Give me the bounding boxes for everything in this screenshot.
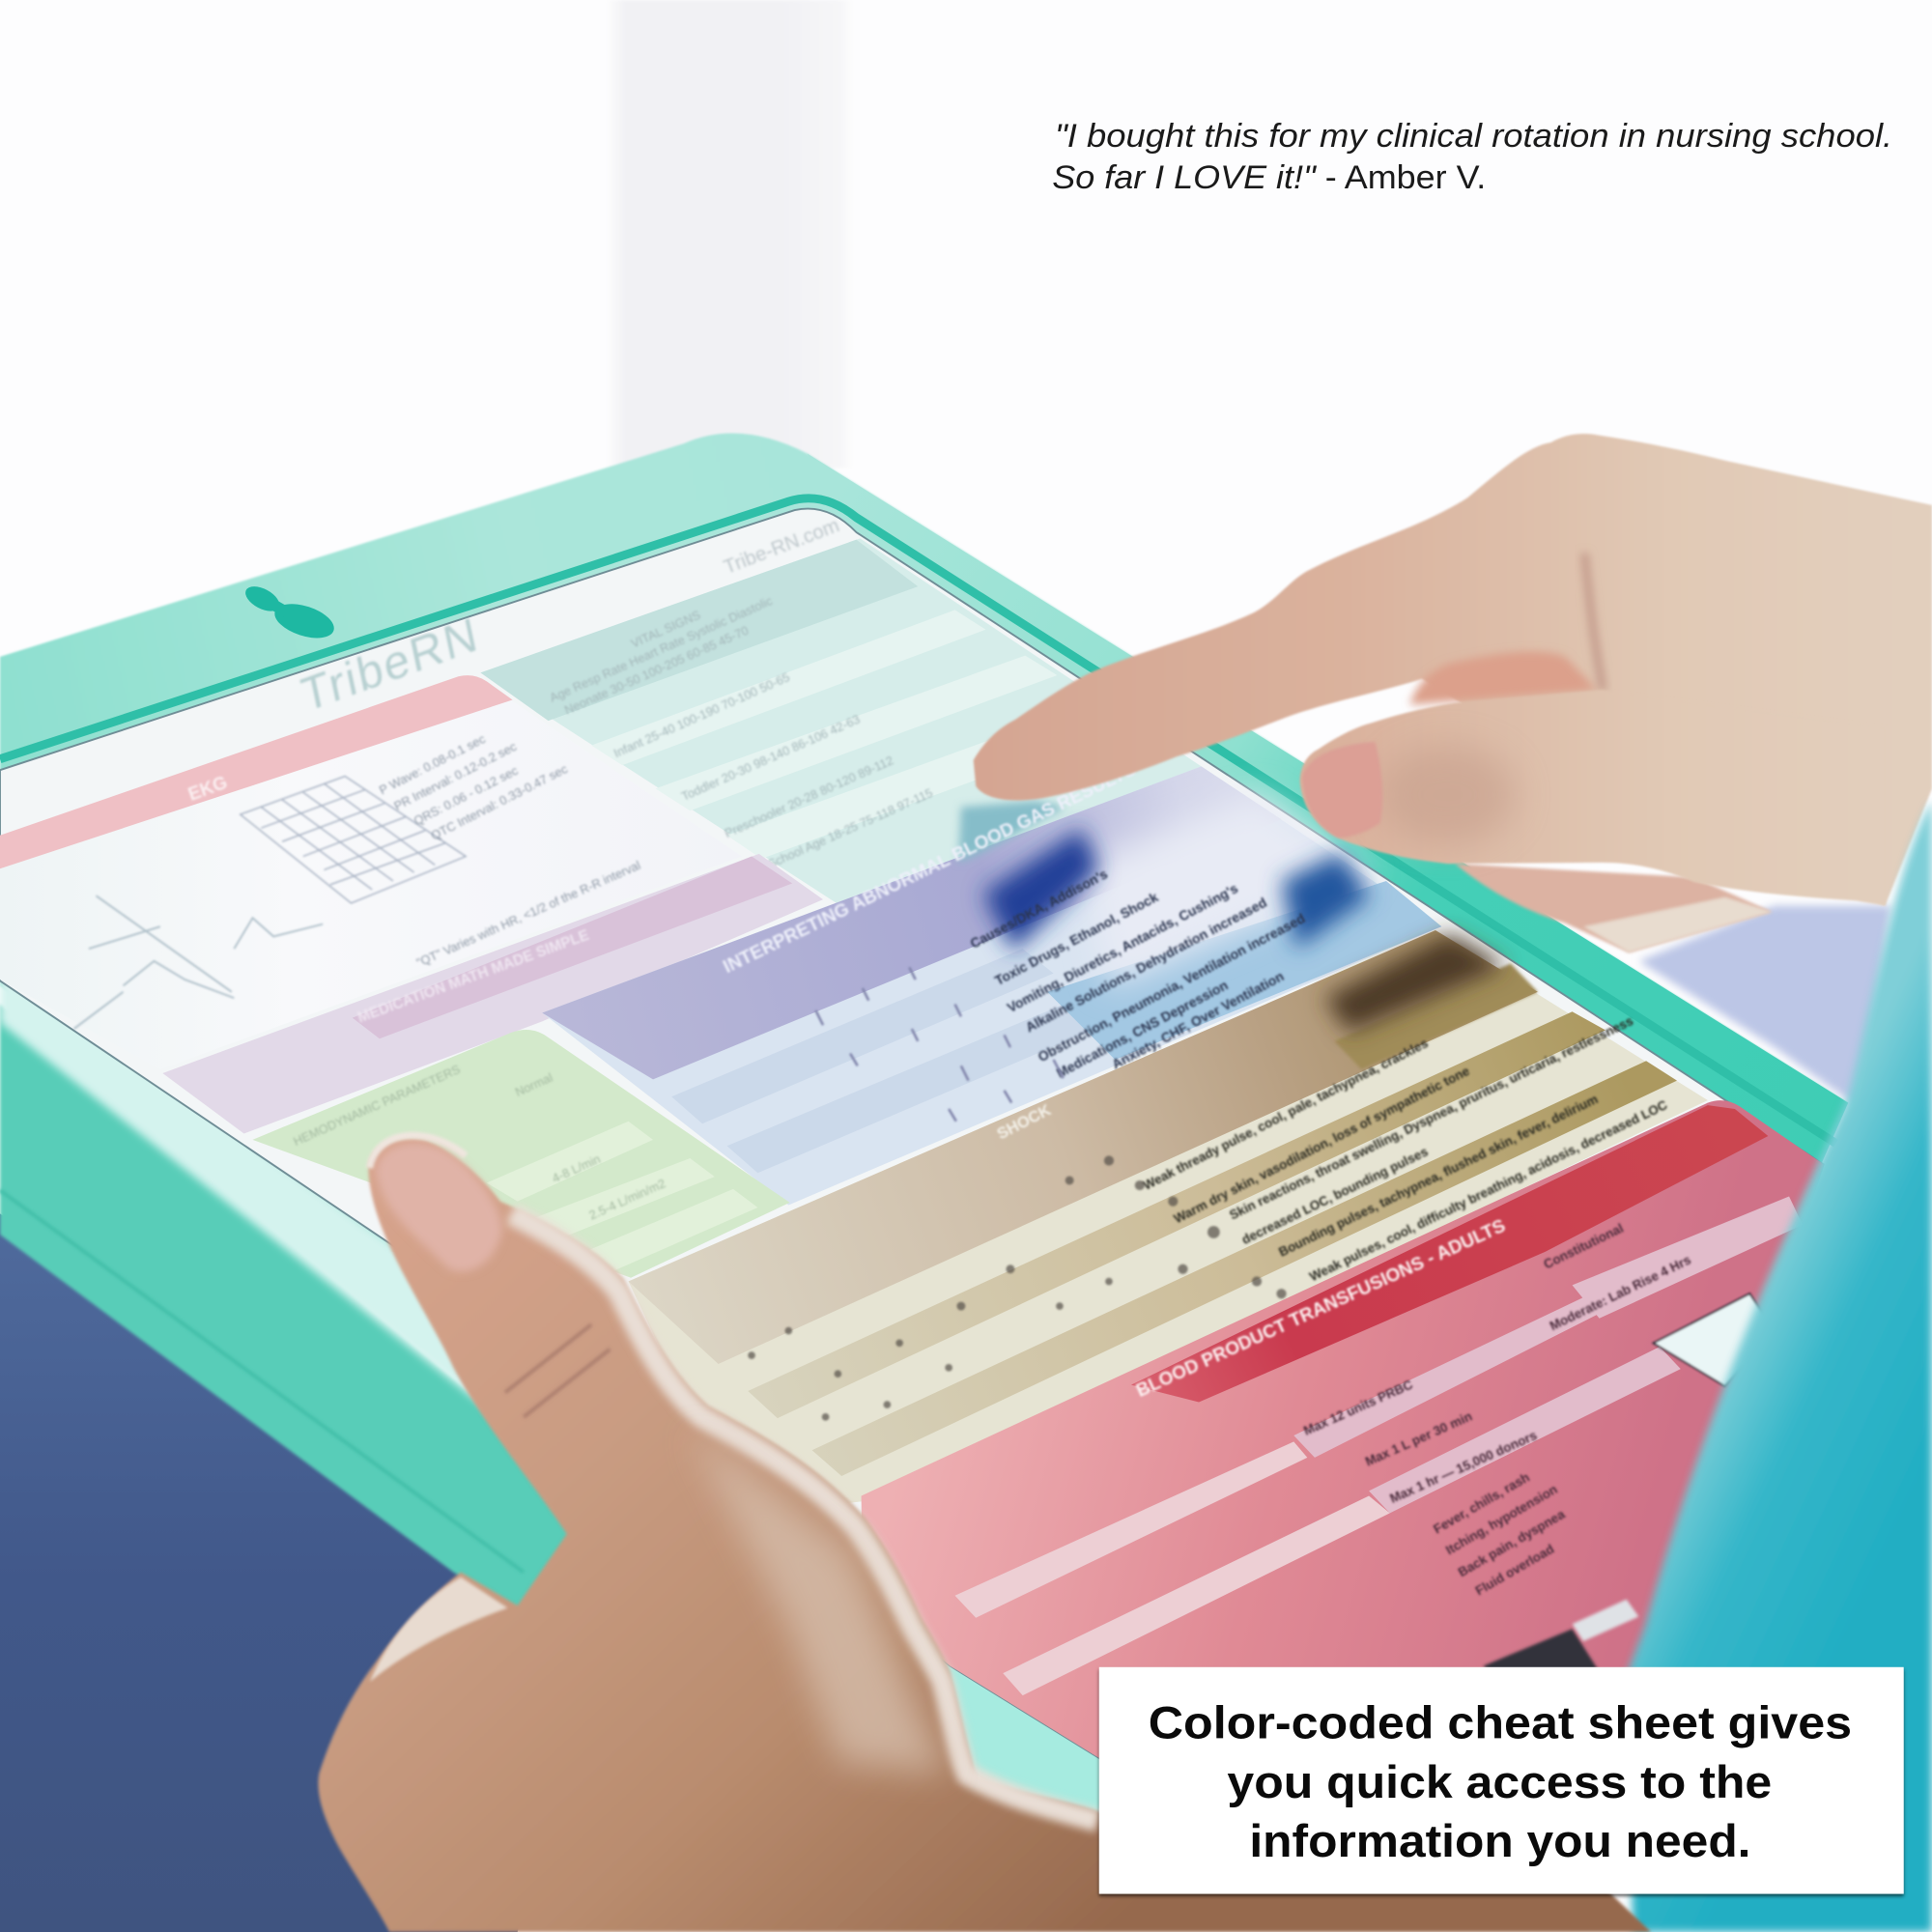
panel: shock <box>629 930 1708 1516</box>
shock assessment lines: Weak pulses, cool, difficulty breathing, acidosis, decreased LOC <box>1307 1097 1670 1284</box>
shock assessment lines: decreased LOC, bounding pulses <box>1239 1144 1431 1247</box>
transfusion lavender rows <box>1293 1197 1803 1513</box>
shock assessment lines <box>1141 1013 1670 1284</box>
shock table marks <box>748 1155 1287 1421</box>
hand: lower left thumb holding <box>318 1135 1651 1932</box>
sheet header logo: TribeRN <box>297 609 481 723</box>
vitals row text: Age Resp Rate Heart Rate Systolic Diastolic <box>548 593 775 705</box>
blood gas cause lines: Toxic Drugs, Ethanol, Shock <box>992 889 1161 988</box>
vitals row text: VITAL SIGNS <box>629 608 702 651</box>
thumb light rim <box>511 1213 1097 1821</box>
EKG interval text: "QT" Varies with HR, <1/2 of the R-R interval <box>414 858 642 970</box>
palm light rim <box>370 1577 508 1682</box>
shock assessment lines: Skin reactions, throat swelling, Dyspnea, pruritus, urticaria, restlessness <box>1227 1013 1635 1222</box>
sleeve: teal scrubs <box>1627 801 1932 1932</box>
sheet corner pale smudge <box>1573 1600 1638 1641</box>
frame: right side <box>807 453 1848 1164</box>
transfusion pale rows <box>955 1441 1390 1695</box>
green background <box>252 1030 790 1278</box>
blood gas background <box>542 766 1441 1205</box>
vitals teal header <box>480 540 918 721</box>
thumb shading <box>1380 746 1516 844</box>
navy trousers background <box>0 1213 591 1932</box>
transfusion text lines: Constitutional <box>1542 1221 1626 1271</box>
hand mottled highlight <box>690 1430 949 1775</box>
green row text: 4-8 L/min <box>550 1151 603 1185</box>
shock header <box>629 930 1538 1364</box>
panel: interpreting blood gas <box>542 759 1441 1205</box>
inner palm pink shade <box>1409 652 1597 705</box>
blood gas cause lines: Medications, CNS Depression <box>1054 977 1231 1081</box>
blood gas header <box>542 766 1282 1079</box>
blood gas cause lines: Causes/DKA, Addison's <box>968 866 1110 952</box>
blood gas heading: INTERPRETING ABNORMAL BLOOD GAS RESULTS <box>721 759 1140 978</box>
transfusion text lines: Itching, hypotension <box>1443 1482 1560 1557</box>
background pillar <box>607 0 853 469</box>
panel: medication math <box>162 854 823 1133</box>
shock heading: SHOCK <box>994 1100 1054 1143</box>
dark blue header spot <box>983 828 1099 952</box>
frame: lower left teal body <box>0 1005 579 1627</box>
EKG grid <box>241 777 466 903</box>
blue shadow spot <box>1282 853 1370 949</box>
vitals row text: Infant 25-40 100-190 70-100 50-65 <box>611 669 792 760</box>
blood gas cause lines: Obstruction, Pneumonia, Ventilation increased <box>1036 910 1308 1065</box>
panel: vital signs <box>480 538 1202 906</box>
index finger and hand back <box>974 434 1932 906</box>
vitals background <box>480 538 1202 906</box>
panel: EKG <box>0 675 742 1069</box>
EKG heading text: EKG <box>185 773 230 806</box>
EKG header <box>0 675 513 868</box>
transfusion text lines: Fever, chills, rash <box>1431 1469 1532 1537</box>
panel: blood product transfusions <box>862 1100 1824 1766</box>
sheet header logo: Tribe-RN.com <box>721 515 842 579</box>
hand: upper right pointing <box>974 434 1932 952</box>
shock dark band <box>1324 934 1506 1033</box>
green row text: HEMODYNAMIC PARAMETERS <box>291 1062 463 1149</box>
green light rows <box>487 1122 757 1275</box>
EKG interval text: PR Interval: 0.12-0.2 sec <box>391 739 520 813</box>
shock olive band <box>1334 963 1538 1069</box>
vitals row text: School Age 18-25 75-118 97-115 <box>765 785 935 871</box>
EKG interval text <box>377 731 642 970</box>
knuckle crease <box>1584 554 1603 690</box>
quote line 2: So far I LOVE it!" - Amber V. <box>1052 159 1486 196</box>
EKG interval text: QTC Interval: 0.33-0.47 sec <box>429 761 570 843</box>
quote <box>1052 118 1892 196</box>
blood gas cause lines: Vomiting, Diuretics, Antacids, Cushing's <box>1005 880 1240 1015</box>
quote line 1: "I bought this for my clinical rotation in nursing school. <box>1055 118 1892 155</box>
thumb nail <box>1302 742 1382 838</box>
blood gas cause lines: Alkaline Solutions, Dehydration increased <box>1023 895 1269 1036</box>
blood gas highlights <box>1084 795 1368 985</box>
blood gas cause lines: Anxiety, CHF, Over Ventilation <box>1109 968 1287 1072</box>
vitals row text: Preschooler 20-28 80-120 89-112 <box>723 753 895 840</box>
transfusion text lines: Moderate: Lab Rise 4 Hrs <box>1548 1252 1693 1333</box>
sheet base <box>0 509 1824 1766</box>
transfusion text lines <box>1301 1221 1693 1598</box>
thumb nail tip rim <box>370 1135 466 1168</box>
sheet corner dark shadow <box>1484 1629 1602 1676</box>
thumb nail <box>376 1143 501 1272</box>
blood gas stripes <box>671 949 1115 1173</box>
shock tan stripes <box>748 1011 1677 1476</box>
EKG interval text: QRS: 0.06 - 0.12 sec <box>412 763 521 828</box>
shock assessment lines: Bounding pulses, tachypnea, flushed skin, fever, delirium <box>1276 1092 1601 1260</box>
EKG waveform <box>74 895 323 1029</box>
frame: keyhole slot <box>242 582 338 644</box>
transfusion text lines: Back pain, dyspnea <box>1456 1507 1568 1579</box>
green row text: Normal <box>513 1070 554 1099</box>
callout: caption box <box>1099 1667 1904 1893</box>
transfusion body <box>862 1100 1824 1766</box>
caption line 2: you quick access to the <box>1227 1757 1772 1808</box>
fingertip pale <box>1583 897 1772 952</box>
transfusion text lines: Max 12 units PRBC <box>1301 1377 1415 1438</box>
medication heading: MEDICATION MATH MADE SIMPLE <box>355 927 591 1026</box>
vitals row text: Toddler 20-30 98-140 86-106 42-63 <box>679 712 862 804</box>
vitals row text: Neonate 30-50 100-205 60-85 45-70 <box>562 623 751 718</box>
caption line 1: Color-coded cheat sheet gives <box>1149 1698 1852 1749</box>
frame: main mint body <box>0 434 1848 1768</box>
sheet header logo <box>297 515 842 723</box>
shock assessment lines: Warm dry skin, vasodilation, loss of sympathetic tone <box>1172 1064 1472 1226</box>
lower fingers under thumb <box>1455 864 1772 952</box>
transfusion white callout <box>1654 1293 1775 1386</box>
thumb <box>1300 690 1886 906</box>
vitals row text <box>548 593 935 871</box>
medication background <box>162 854 823 1133</box>
finger shadow on vitals <box>958 801 1065 863</box>
clipboard frame <box>0 434 1848 1814</box>
frame: inner rim <box>0 498 1836 1144</box>
green row text: 2.5-4 L/min/m2 <box>586 1176 668 1222</box>
frame: lower left light band <box>0 961 579 1482</box>
transfusion header <box>1131 1105 1768 1403</box>
vitals light rows <box>591 610 1133 859</box>
transfusion text lines: Max 1 L per 30 min <box>1363 1408 1474 1469</box>
transfusion text lines: Fluid overload <box>1473 1542 1556 1598</box>
transfusion text lines: Max 1 hr — 15,000 donors <box>1387 1428 1539 1506</box>
blood gas cause lines <box>968 866 1308 1081</box>
EKG panel background <box>0 675 742 1069</box>
shock assessment lines: Weak thready pulse, cool, pale, tachypnea, crackles <box>1141 1036 1431 1193</box>
hand and thumb shape <box>318 1138 1651 1932</box>
EKG interval text: P Wave: 0.08-0.1 sec <box>377 731 488 797</box>
transfusion heading: BLOOD PRODUCT TRANSFUSIONS - ADULTS <box>1133 1216 1509 1402</box>
lavender background at right <box>1638 906 1891 1109</box>
panel: green reference <box>252 1030 790 1278</box>
caption line 3: information you need. <box>1249 1816 1750 1867</box>
thumb creases <box>505 1324 610 1417</box>
frame: lower left groove <box>0 1190 524 1573</box>
blood gas arrows <box>815 967 1064 1122</box>
shock base <box>629 930 1708 1516</box>
green row text <box>291 1062 668 1222</box>
frame: bottom corner <box>936 1658 1122 1814</box>
caption background <box>1099 1667 1904 1893</box>
cheat sheet <box>0 509 1824 1766</box>
medication header <box>353 856 792 1038</box>
blood gas blue lower band <box>1047 881 1441 1060</box>
